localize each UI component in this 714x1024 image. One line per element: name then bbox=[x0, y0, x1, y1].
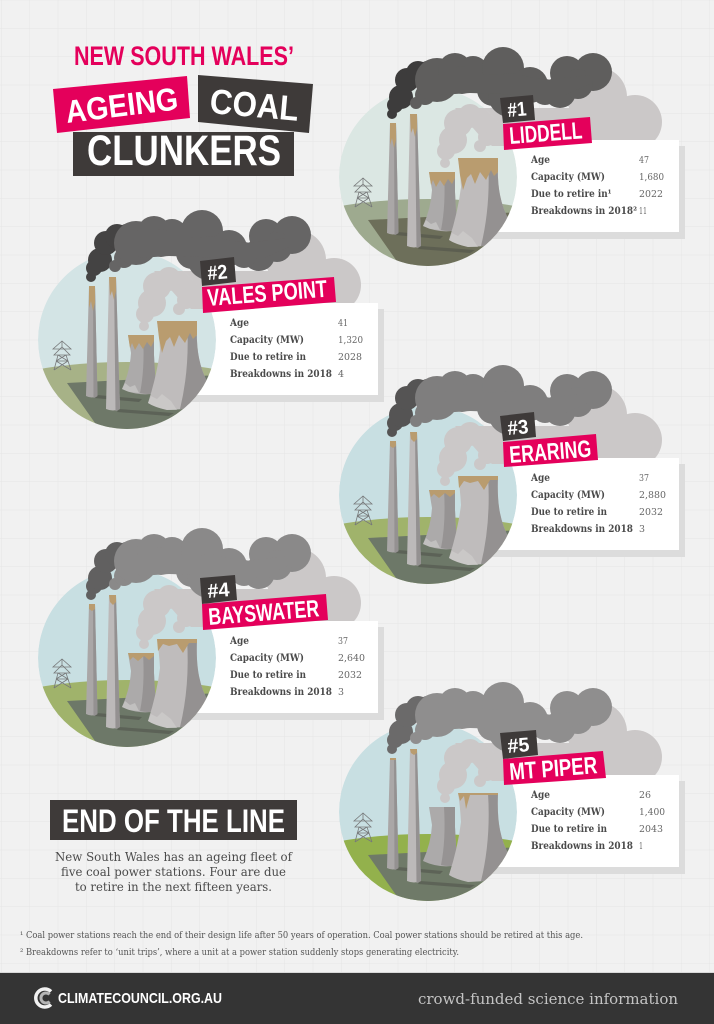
title: New South Wales: NEW SOUTH WALES’ bbox=[74, 41, 294, 71]
data table card bbox=[490, 775, 685, 874]
data table text: 37 bbox=[338, 636, 348, 647]
rank badge bbox=[200, 257, 236, 286]
data table text: 11 bbox=[639, 206, 647, 217]
data table text: 2032 bbox=[639, 507, 663, 518]
heading: end of the line: END OF THE LINE bbox=[62, 803, 285, 839]
panel: #2 Vales Point bbox=[38, 210, 384, 429]
data table text: Age bbox=[229, 318, 249, 329]
data table text: Due to retire in bbox=[230, 670, 307, 681]
rank badge: #4 bbox=[207, 579, 231, 603]
station name: MT PIPER bbox=[508, 752, 598, 786]
illustration: background cloud bbox=[437, 385, 662, 486]
illustration: power station bbox=[339, 89, 517, 266]
illustration: power station bbox=[38, 570, 216, 747]
panel: #4 Bayswater bbox=[38, 528, 384, 747]
footnotes: ¹ Coal power stations reach the end of their design life after 50 years of operation. Coal power stations should be retired at this age. bbox=[20, 931, 583, 941]
data table card bbox=[490, 458, 685, 557]
data table text: Age bbox=[530, 790, 550, 801]
station name: BAYSWATER bbox=[207, 595, 320, 631]
data table text: 2,640 bbox=[338, 653, 365, 664]
panel: #1 Liddell bbox=[339, 47, 685, 266]
illustration: power station bbox=[339, 724, 517, 901]
data table text: Due to retire in¹ bbox=[531, 189, 612, 200]
title block bbox=[53, 41, 313, 176]
data table text: Due to retire in bbox=[531, 507, 608, 518]
illustration: background cloud bbox=[136, 230, 361, 331]
data table text bbox=[530, 790, 665, 852]
illustration: smoke bbox=[86, 210, 311, 282]
illustration: smoke bbox=[387, 365, 612, 437]
illustration: smoke bbox=[387, 682, 612, 754]
data table text: 1,680 bbox=[639, 172, 664, 183]
data table text: Capacity (MW) bbox=[531, 807, 605, 818]
rank badge: #3 bbox=[507, 416, 529, 440]
station name: VALES POINT bbox=[206, 276, 328, 312]
title box: clunkers: CLUNKERS bbox=[87, 127, 281, 175]
data table text: 47 bbox=[639, 155, 649, 166]
data table card bbox=[189, 621, 384, 720]
data table text: Capacity (MW) bbox=[230, 335, 304, 346]
data table text: 37 bbox=[639, 473, 649, 484]
summary text bbox=[55, 849, 293, 894]
data table text: 41 bbox=[338, 318, 348, 329]
data table text: 26 bbox=[639, 790, 651, 801]
summary text: New South Wales has an ageing fleet of bbox=[55, 849, 293, 864]
data table card bbox=[490, 140, 685, 239]
illustration: background cloud bbox=[437, 67, 662, 168]
rank badge: #1 bbox=[507, 98, 527, 122]
data table text: 1 bbox=[639, 841, 643, 852]
rank badge: #5 bbox=[507, 734, 530, 758]
data table text: Age bbox=[229, 636, 249, 647]
data table text: Capacity (MW) bbox=[531, 490, 605, 501]
summary text: to retire in the next fifteen years. bbox=[75, 879, 272, 894]
data table text: Capacity (MW) bbox=[230, 653, 304, 664]
title box: ageing: AGEING bbox=[63, 80, 180, 130]
data table text: 3 bbox=[639, 524, 645, 535]
title box: coal: COAL bbox=[208, 82, 300, 129]
data table text bbox=[530, 473, 666, 535]
station name: ERARING bbox=[508, 436, 592, 469]
tagline: crowd-funded science information bbox=[418, 990, 678, 1008]
website address: CLIMATECOUNCIL.ORG.AU bbox=[58, 990, 222, 1007]
data table text: Breakdowns in 2018 bbox=[531, 524, 633, 535]
station name: LIDDELL bbox=[508, 117, 583, 150]
data table text: 2043 bbox=[639, 824, 663, 835]
illustration: power station bbox=[38, 252, 216, 429]
data table text: Breakdowns in 2018² bbox=[531, 206, 637, 217]
data table text: Breakdowns in 2018 bbox=[531, 841, 633, 852]
data table text: 3 bbox=[338, 687, 344, 698]
rank badge bbox=[500, 95, 535, 123]
data table card bbox=[189, 303, 384, 402]
data table text bbox=[229, 636, 365, 698]
data table text: Breakdowns in 2018 bbox=[230, 369, 332, 380]
rank badge bbox=[500, 730, 538, 759]
data table text: Capacity (MW) bbox=[531, 172, 605, 183]
illustration: background cloud bbox=[136, 548, 361, 649]
data table text: 1,400 bbox=[639, 807, 665, 818]
illustration: background cloud bbox=[437, 702, 662, 803]
data table text: 2032 bbox=[338, 670, 362, 681]
data table text bbox=[229, 318, 363, 380]
data table text bbox=[530, 155, 664, 217]
rank badge: #2 bbox=[207, 261, 228, 285]
data table text: Age bbox=[530, 473, 550, 484]
illustration: smoke bbox=[86, 528, 311, 600]
icon: climate council logo bbox=[36, 989, 51, 1007]
data table text: 2022 bbox=[639, 189, 663, 200]
data table text: 1,320 bbox=[338, 335, 363, 346]
illustration: smoke bbox=[387, 47, 612, 119]
data table text: Age bbox=[530, 155, 550, 166]
footnotes: ² Breakdowns refer to ‘unit trips’, where a unit at a power station suddenly stops generating electricity. bbox=[20, 947, 459, 958]
data table text: 4 bbox=[338, 369, 344, 380]
data table text: 2028 bbox=[338, 352, 362, 363]
footnotes bbox=[20, 931, 583, 958]
data table text: Breakdowns in 2018 bbox=[230, 687, 332, 698]
rank badge bbox=[500, 412, 536, 441]
panel: #3 Eraring bbox=[339, 365, 685, 584]
data table text: 2,880 bbox=[639, 490, 666, 501]
footer bar bbox=[0, 972, 714, 1024]
summary text: five coal power stations. Four are due bbox=[61, 864, 286, 879]
illustration: power station bbox=[339, 407, 517, 584]
data table text: Due to retire in bbox=[531, 824, 608, 835]
panel: #5 Mt Piper bbox=[339, 682, 685, 901]
rank badge bbox=[200, 575, 237, 604]
data table text: Due to retire in bbox=[230, 352, 307, 363]
